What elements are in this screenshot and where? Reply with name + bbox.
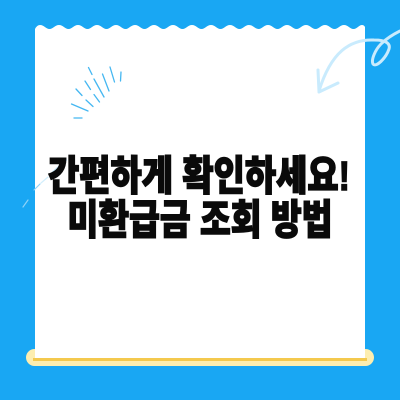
title [48,153,350,243]
title line 2: 미환급금 조회 방법 [68,197,332,243]
white scalloped card [35,25,365,358]
icon: curly arrow [318,31,400,92]
icon: sparkle rays [72,67,121,118]
faint diagonal accent [23,160,66,207]
yellow base bar [26,349,374,366]
